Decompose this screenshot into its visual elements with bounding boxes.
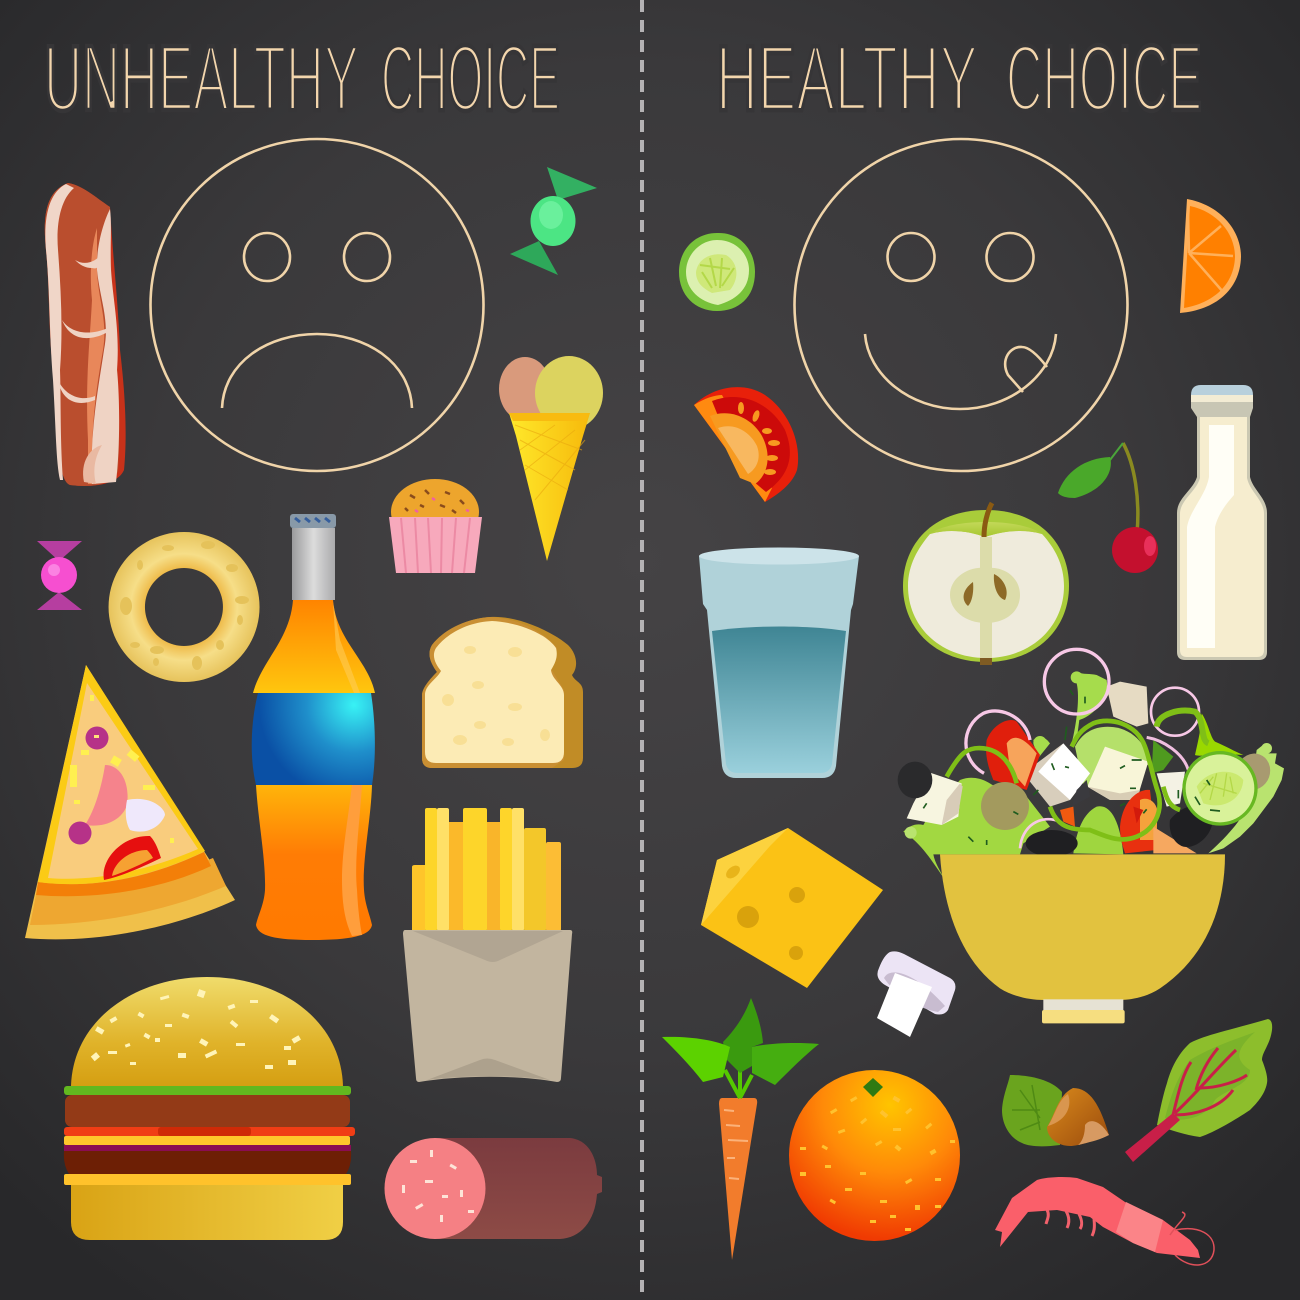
icon: pink candy	[37, 541, 82, 610]
icon: sad face	[150, 139, 484, 471]
icon: shrimp	[995, 1177, 1214, 1265]
icon: ice cream	[499, 356, 603, 561]
icon: glass of water	[699, 548, 859, 778]
icon: french fries	[403, 808, 572, 1082]
icon: salami	[384, 1138, 602, 1239]
icon: mushroom	[877, 951, 955, 1037]
icon: green candy	[510, 167, 597, 275]
text: CHOICE	[381, 26, 560, 130]
icon: pizza slice	[25, 665, 235, 939]
salad greens	[903, 671, 1284, 877]
icon: soda bottle	[252, 514, 375, 940]
icon: happy face	[794, 139, 1128, 471]
icon: cupcake	[389, 479, 482, 573]
icon: tomato wedge	[694, 387, 798, 502]
green pepper	[947, 711, 1208, 839]
feta cubes	[907, 682, 1185, 825]
olive green ball	[981, 782, 1029, 830]
title: unhealthy choice: UNHEALTHY	[44, 26, 359, 130]
icon: onion ring	[109, 532, 260, 682]
icon: apple half	[903, 503, 1069, 665]
panel: salad bowl	[898, 649, 1284, 1023]
icon: bacon	[45, 183, 126, 486]
title: healthy choice: HEALTHY	[716, 26, 978, 130]
icon: cucumber slice	[679, 233, 755, 311]
herbs	[923, 690, 1220, 845]
icon: orange	[789, 1070, 960, 1241]
onion rings	[966, 649, 1199, 848]
icon: chard leaf	[1125, 1019, 1272, 1162]
tomato slices	[986, 720, 1197, 853]
icon: cheese wedge	[701, 828, 883, 988]
dashed divider	[640, 0, 644, 1300]
icon: orange slice	[1180, 199, 1241, 313]
icon: cherry	[1058, 443, 1158, 573]
icon: bread slice	[422, 617, 583, 768]
bowl	[940, 854, 1225, 1000]
icon: carrot	[662, 998, 819, 1260]
icon: hazelnut	[1002, 1075, 1109, 1146]
icon: milk bottle	[1177, 385, 1267, 660]
olives	[898, 749, 1275, 857]
cucumber slice	[1182, 751, 1258, 826]
bowl foot	[1042, 999, 1125, 1023]
icon: burger	[64, 977, 355, 1240]
